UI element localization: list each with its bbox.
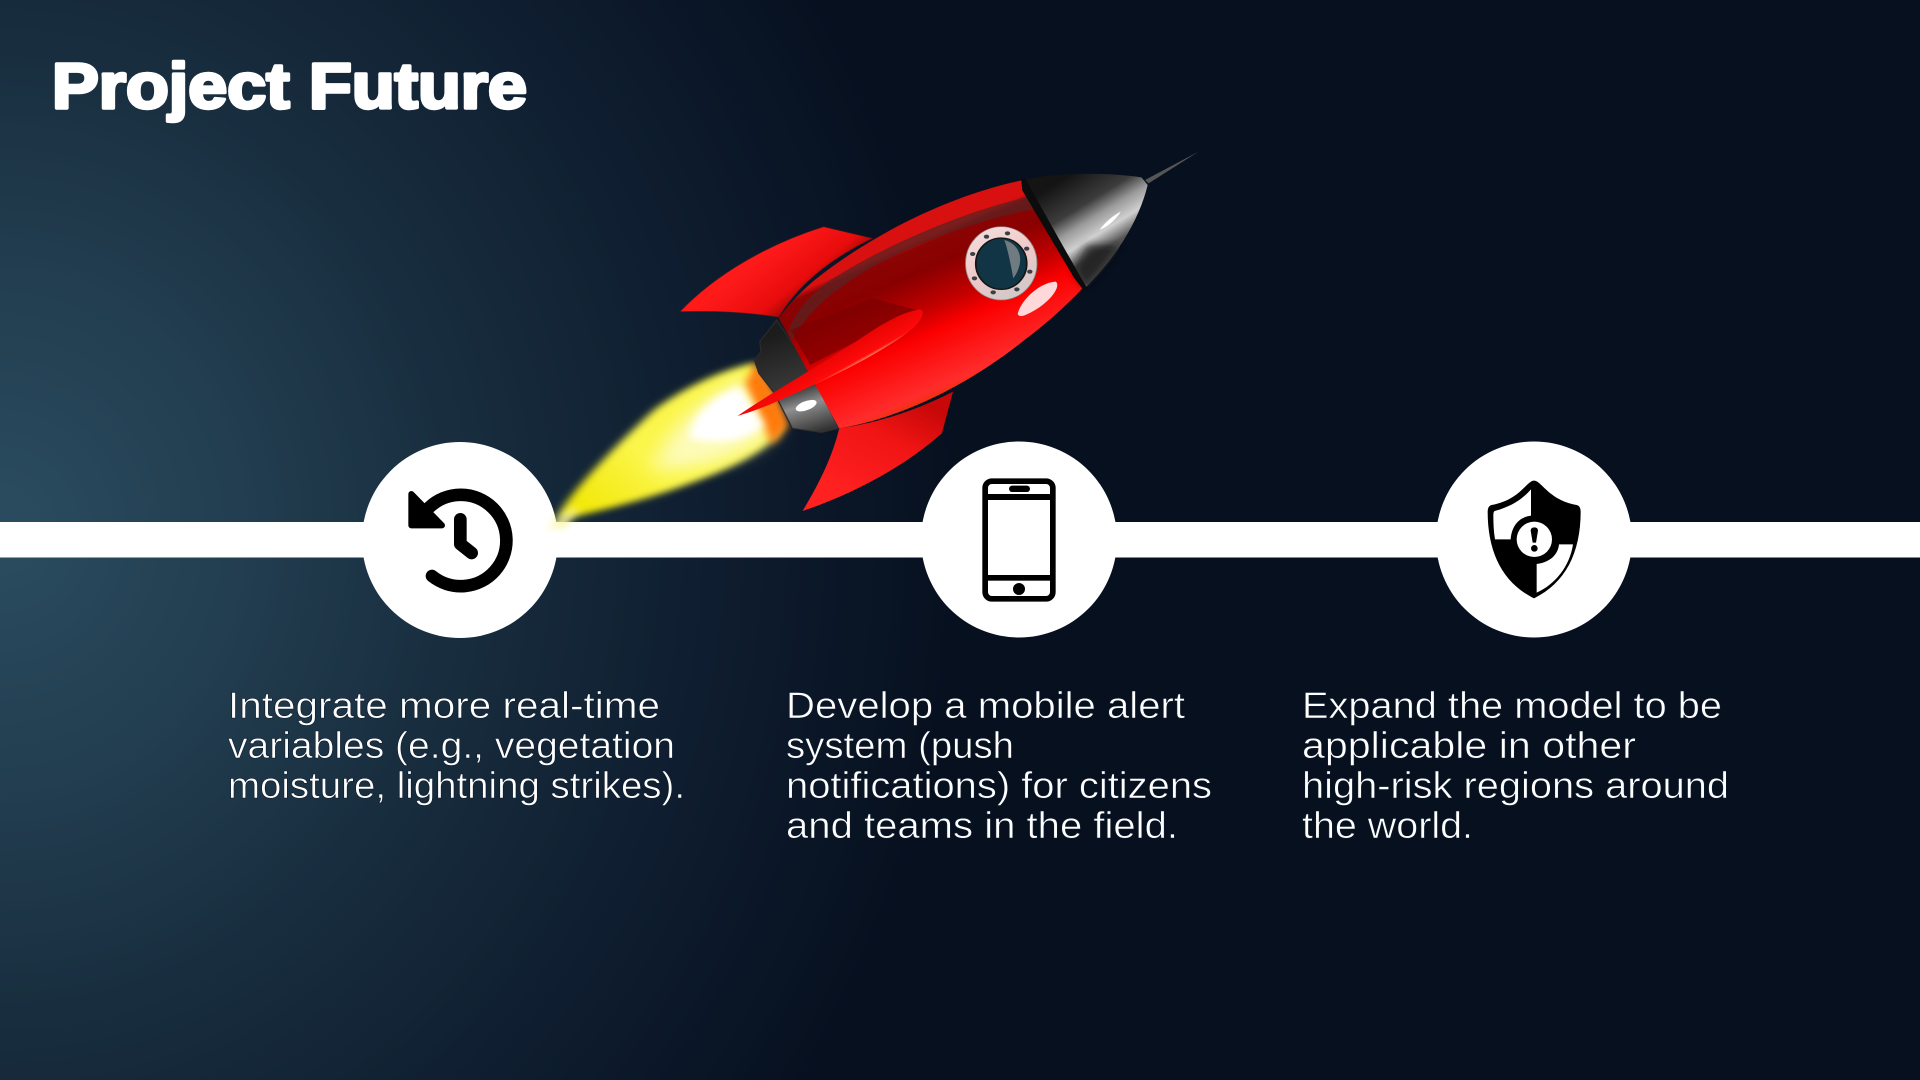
body muted reflection band	[788, 197, 1033, 340]
title: Project Future	[52, 50, 527, 122]
engine section	[754, 320, 839, 433]
step 3 text	[1302, 685, 1729, 846]
nose cone	[1024, 152, 1199, 288]
step 1 node	[362, 442, 558, 638]
step 3 text: high-risk regions around	[1302, 765, 1729, 806]
body shadow panel	[791, 298, 917, 365]
step 1 text	[228, 685, 685, 806]
step 3 text: applicable in other	[1302, 725, 1636, 766]
step 3 node	[1436, 442, 1632, 638]
step 2 text: notifications) for citizens	[786, 765, 1212, 806]
icon: history clock	[411, 494, 506, 586]
centre fin	[737, 309, 923, 416]
upper fin	[680, 227, 873, 317]
step 2 text: and teams in the field.	[786, 805, 1178, 846]
rocket body	[779, 180, 1083, 428]
icon: shield with alert	[1488, 481, 1581, 598]
icon: smartphone	[985, 481, 1053, 599]
body highlight	[1018, 282, 1057, 316]
flame	[547, 362, 788, 528]
step 3 text: the world.	[1302, 805, 1473, 846]
lower fin	[803, 392, 953, 511]
step 2 text: Develop a mobile alert	[786, 685, 1186, 726]
step 2 text	[786, 685, 1212, 846]
step 1 text: moisture, lightning strikes).	[228, 765, 685, 806]
step 2 text: system (push	[786, 725, 1014, 766]
step 1 text: Integrate more real-time	[228, 685, 660, 726]
step 2 node	[921, 442, 1117, 638]
rocket illustration	[547, 152, 1199, 528]
porthole	[966, 227, 1037, 300]
step 3 text: Expand the model to be	[1302, 685, 1722, 726]
step 1 text: variables (e.g., vegetation	[228, 725, 675, 766]
timeline bar	[0, 522, 1920, 558]
